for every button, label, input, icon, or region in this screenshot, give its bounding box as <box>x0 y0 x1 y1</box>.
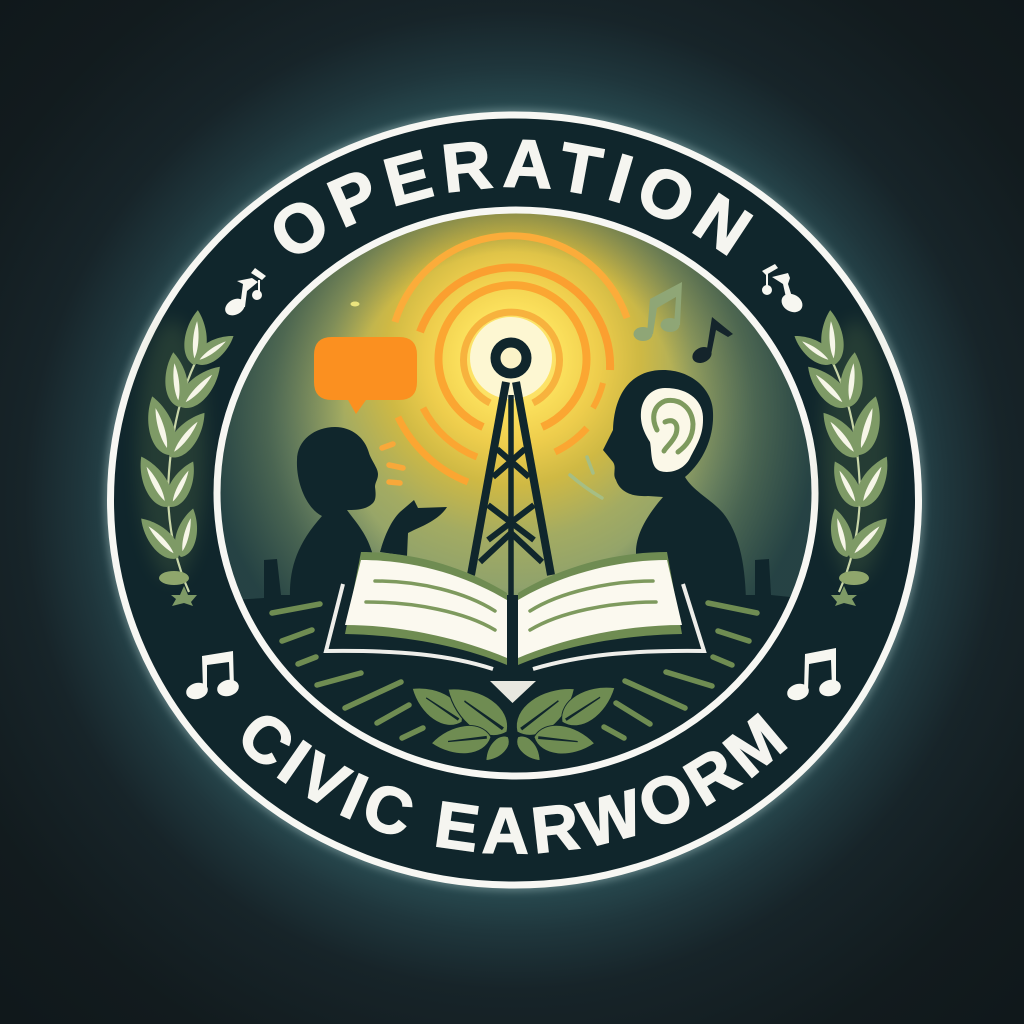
radio tower <box>467 338 555 595</box>
left person hand <box>380 500 447 556</box>
right laurel <box>789 309 897 606</box>
book text lines <box>366 581 656 630</box>
left page backing <box>345 552 507 665</box>
icon: note bottom left <box>184 651 241 702</box>
black note <box>692 317 733 363</box>
title top: OPERATION: OPERATION <box>274 140 754 256</box>
left person silhouette <box>290 427 378 600</box>
radio rings <box>395 236 627 482</box>
speech dashes <box>382 444 403 483</box>
open book <box>326 552 704 669</box>
left cover <box>326 584 493 669</box>
ground <box>243 559 790 772</box>
badge band <box>110 115 918 885</box>
bottom leaf cluster <box>412 688 614 760</box>
left laurel <box>131 309 239 606</box>
right person silhouette <box>603 370 746 600</box>
green sound marks <box>570 457 602 498</box>
green note <box>634 282 682 341</box>
ground dashes <box>272 603 757 738</box>
small spark <box>350 302 360 306</box>
badge outer ring glow <box>110 114 920 886</box>
icon: note bottom right <box>785 648 843 703</box>
right cover <box>533 584 704 669</box>
speech bubble <box>314 337 417 414</box>
icon: note top right <box>762 264 806 316</box>
title bottom: CIVIC EARWORM: CIVIC EARWORM <box>242 712 788 854</box>
pointer triangle <box>490 681 536 703</box>
left page <box>345 560 507 658</box>
icon: note top left <box>222 268 266 319</box>
inner illustration disc <box>220 214 812 760</box>
right page <box>518 560 682 658</box>
ear <box>641 388 703 472</box>
inner ring <box>217 210 815 776</box>
beacon core <box>470 317 552 399</box>
right page backing <box>518 552 682 665</box>
